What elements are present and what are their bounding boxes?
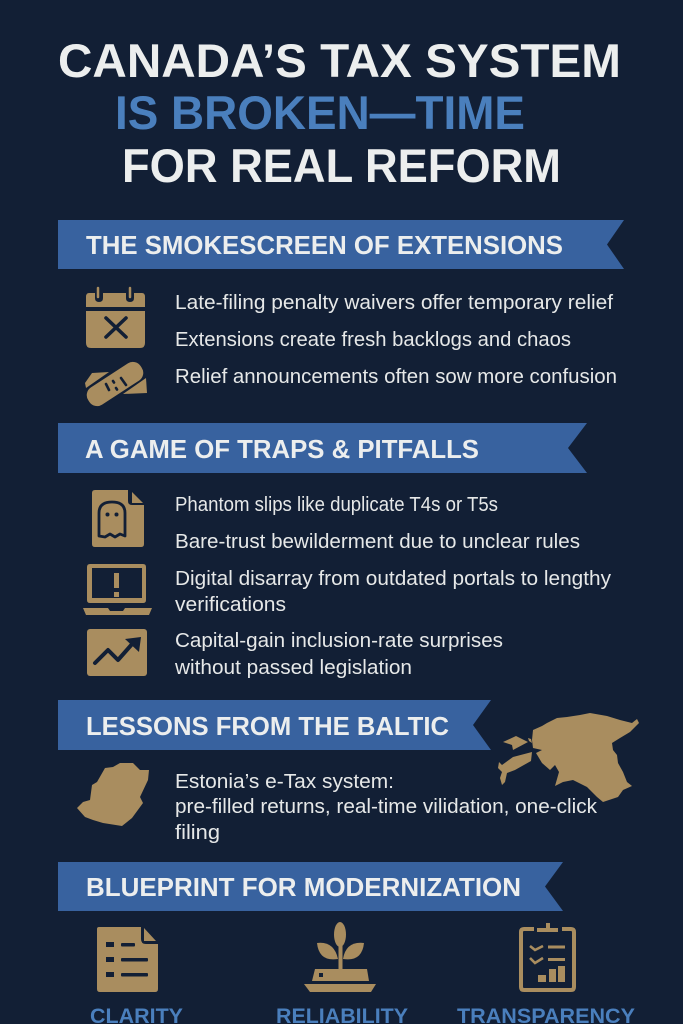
icon: ghost document [92,490,144,547]
pillar: clarity [90,927,183,1024]
text: Estonia e-Tax description: pre-filled returns, real-time vilidation, one-click [175,796,598,818]
text: Estonia e-Tax description: Estonia’s e-Tax system: [175,771,394,793]
title: IS BROKEN—TIME [115,86,525,139]
title: CANADA’S TAX SYSTEM [58,34,621,87]
icon: calendar with X [86,288,145,348]
icon: clipboard with checks and bars [521,923,574,990]
list: trap points: Digital disarray from outdated portals to lengthy [175,568,611,590]
icon: bandage [82,357,148,411]
list: trap points: Phantom slips like duplicate T4s or T5s [175,494,498,516]
list: extension points: Relief announcements often sow more confusion [175,366,617,388]
panel: blueprint for modernization [58,862,635,1024]
icon: trending chart [87,629,147,676]
heading: a game of traps and pitfalls [58,423,587,473]
panel: traps and pitfalls [58,423,611,679]
heading: the smokescreen of extensions: THE SMOKESCREEN OF EXTENSIONS [86,230,563,260]
list: trap points [174,494,611,679]
icon: sprout on plinth [304,922,376,992]
text: Estonia e-Tax description: filing [175,822,220,844]
pillar: transparency [457,923,635,1024]
icon: laptop with warning [83,564,152,615]
list: extension points: Extensions create fresh backlogs and chaos [175,329,571,351]
list: trap points: Bare-trust bewilderment due to unclear rules [175,531,580,553]
list: extension points: Late-filing penalty waivers offer temporary relief [175,292,613,314]
panel: smokescreen of extensions [58,220,624,411]
list: extension points [175,292,617,388]
heading: lessons from the Baltic: LESSONS FROM THE BALTIC [86,711,449,741]
title [58,34,621,192]
heading: the smokescreen of extensions [58,220,624,269]
heading: a game of traps and pitfalls: A GAME OF TRAPS & PITFALLS [85,434,479,464]
text: Estonia e-Tax description [175,771,598,844]
panel: lessons from the Baltic [58,700,639,844]
heading: blueprint for modernization: BLUEPRINT FOR MODERNIZATION [86,872,521,902]
list: trap points: without passed legislation [174,657,412,679]
list: trap points: verifications [175,594,286,616]
heading: blueprint for modernization [58,862,563,911]
title: FOR REAL REFORM [122,139,561,192]
map: Estonia [498,713,639,802]
list: trap points: Capital-gain inclusion-rate surprises [175,630,503,652]
heading: lessons from the Baltic [58,700,491,750]
map: island silhouette [77,763,149,826]
pillar: reliability [276,922,408,1024]
icon: checklist document [97,927,158,992]
